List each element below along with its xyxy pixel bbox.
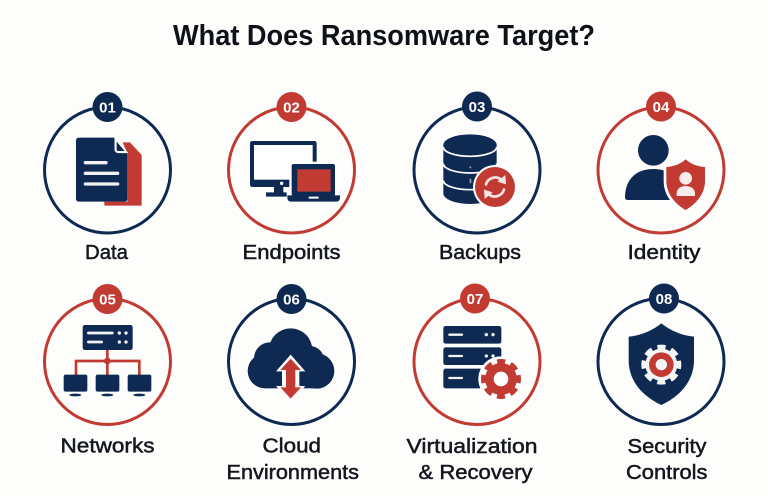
number badge: 03	[469, 99, 485, 116]
label	[406, 435, 538, 484]
icon: cloud with arrows	[248, 328, 334, 402]
panel: 05 Networks	[44, 284, 170, 458]
label: Cloud	[262, 434, 321, 458]
icon: servers with gear	[443, 326, 524, 402]
ring	[44, 107, 170, 233]
number badge: 02	[283, 100, 300, 116]
label: Endpoints	[242, 241, 340, 264]
number badge	[276, 92, 306, 122]
number badge	[92, 284, 122, 314]
icon: documents	[76, 138, 142, 206]
number badge: 08	[656, 291, 672, 308]
number badge: 07	[467, 291, 483, 308]
number badge: 06	[283, 292, 300, 308]
label: Security	[628, 435, 707, 458]
ring	[598, 107, 724, 233]
label: Identity	[628, 241, 701, 264]
panel: 06 Cloud Environments	[226, 284, 359, 484]
icon: database with sync	[443, 134, 517, 209]
number badge	[646, 92, 676, 122]
ring	[44, 298, 170, 424]
icon: shield with gear	[629, 323, 694, 405]
panel: 08 Security Controls	[598, 284, 724, 484]
label: Networks	[60, 434, 154, 458]
number badge	[276, 284, 306, 314]
panel: 01 Data	[44, 92, 170, 264]
ring	[414, 107, 540, 233]
panel: 07 Virtualization & Recovery	[406, 284, 540, 484]
number badge: 05	[99, 292, 116, 308]
panel: 02 Endpoints	[228, 92, 354, 264]
number badge	[460, 284, 490, 314]
title: What Does Ransomware Target?	[173, 20, 595, 52]
ring	[414, 298, 540, 424]
label: Virtualization	[406, 435, 538, 458]
panel: 03 Backups	[414, 92, 540, 264]
icon: monitor and laptop	[250, 141, 340, 203]
ring	[228, 298, 354, 424]
panel: 04 Identity	[598, 92, 724, 264]
label: Data	[85, 241, 129, 264]
icon: network tree	[64, 325, 151, 396]
ring	[228, 107, 354, 233]
number badge	[92, 92, 122, 122]
ring	[598, 298, 724, 424]
label: Environments	[226, 461, 359, 484]
number badge: 01	[99, 100, 116, 116]
number badge: 04	[653, 99, 670, 116]
label	[226, 434, 359, 484]
label	[626, 435, 708, 484]
icon: user with shield	[625, 135, 708, 213]
label: Backups	[439, 241, 521, 264]
label: & Recovery	[418, 461, 533, 484]
label: Controls	[626, 461, 708, 484]
number badge	[649, 284, 679, 314]
number badge	[462, 92, 492, 122]
